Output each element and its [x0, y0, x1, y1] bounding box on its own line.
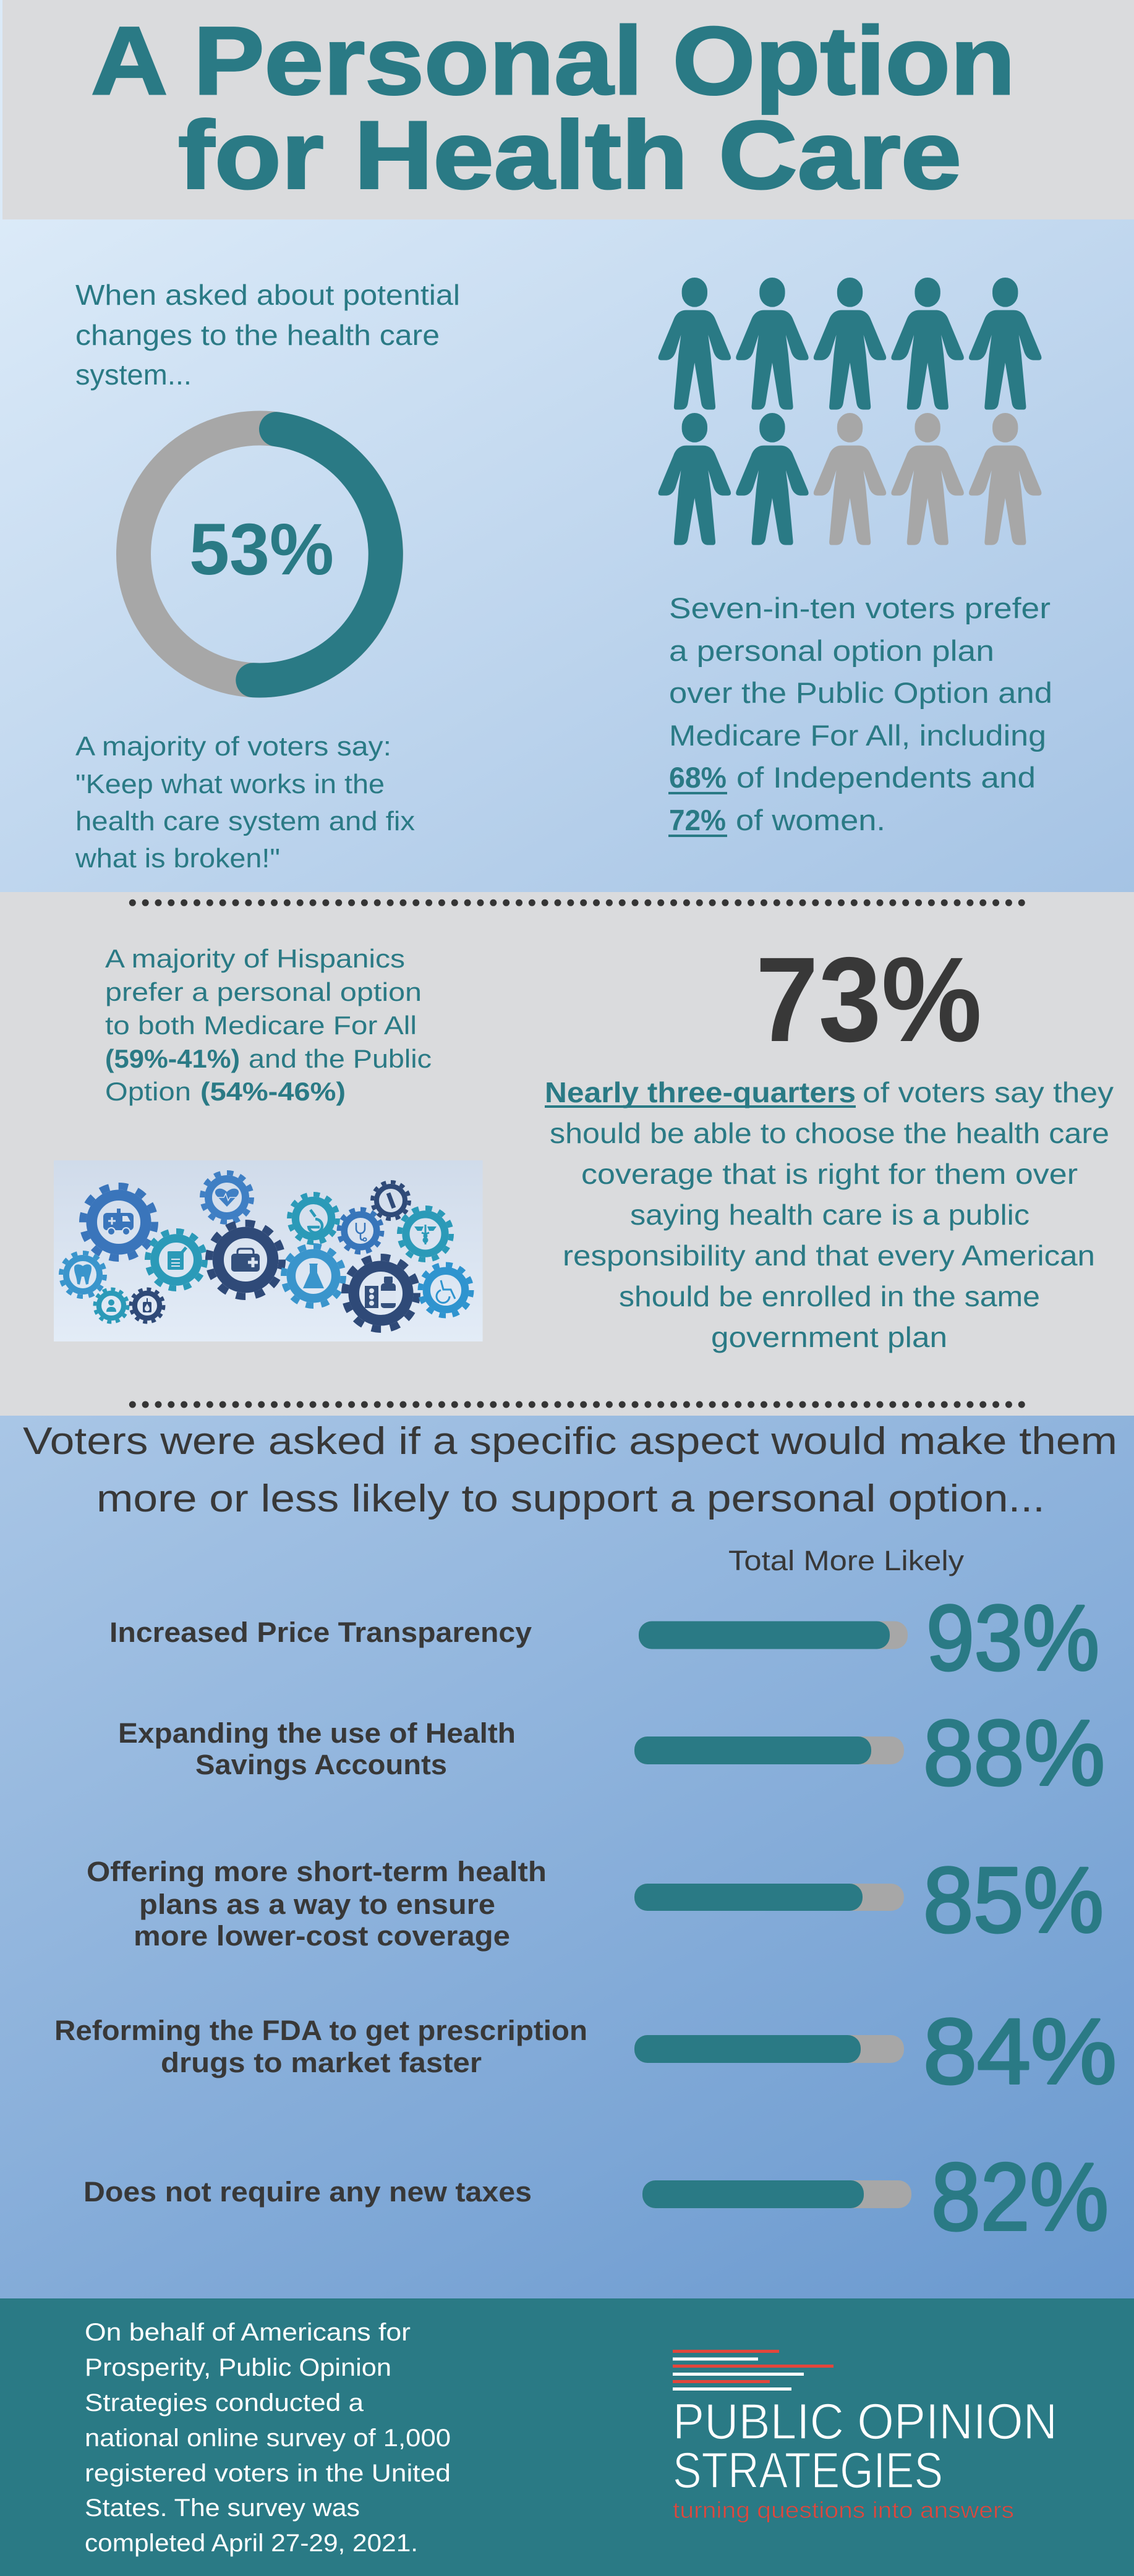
- section heading: Voters were asked if a specific aspect would make them: [23, 1420, 1117, 1463]
- gear: ambulance: [83, 1186, 155, 1258]
- row: no new taxes: Does not require any new taxes: [83, 2176, 532, 2208]
- row: FDA reform: Reforming the FDA to get prescription: [54, 2015, 587, 2046]
- gear: wheelchair: [420, 1265, 471, 1316]
- column label: Total More Likely: [728, 1545, 965, 1576]
- 73% statistic: 73%: [756, 932, 982, 1067]
- methodology text: Prosperity, Public Opinion: [85, 2354, 391, 2381]
- panel: Hispanics and choice: [0, 892, 1134, 1416]
- Hispanics text: [105, 944, 432, 1106]
- row: price transparency: [109, 1586, 1099, 1690]
- logo: Public Opinion Strategies: [673, 2350, 1057, 2523]
- panel: header: [2, 0, 1134, 219]
- panel: specific aspects: [23, 1420, 1117, 2250]
- row: short-term plans: more lower-cost coverage: [134, 1920, 510, 1952]
- gear: nurse: [95, 1289, 128, 1322]
- gear: tooth: [61, 1252, 105, 1297]
- gear: heart: [202, 1173, 252, 1222]
- three-quarters text: saying health care is a public: [630, 1199, 1030, 1231]
- seven-in-ten text: Seven-in-ten voters prefer: [669, 592, 1051, 624]
- Hispanics text: (54%-46%): [200, 1077, 346, 1106]
- seven-in-ten text: Medicare For All, including: [669, 719, 1046, 752]
- methodology text: national online survey of 1,000: [85, 2425, 451, 2452]
- seven-in-ten text: 68%: [669, 761, 727, 794]
- intro text: [75, 279, 460, 391]
- panel: potential changes: [75, 279, 460, 874]
- majority quote: [75, 731, 415, 874]
- majority quote: health care system and fix: [75, 806, 415, 836]
- title: A Personal Option: [91, 7, 1015, 115]
- Hispanics text: Option: [105, 1077, 191, 1106]
- title: for Health Care: [178, 101, 961, 209]
- row: FDA reform: drugs to market faster: [161, 2047, 482, 2078]
- methodology text: Strategies conducted a: [85, 2389, 364, 2417]
- section heading: more or less likely to support a personal option...: [96, 1477, 1045, 1520]
- row: short-term plans: Offering more short-term health: [87, 1856, 547, 1887]
- Hispanics text: and the Public: [249, 1044, 432, 1073]
- Hispanics text: to both Medicare For All: [105, 1011, 417, 1040]
- image: medical gears: [54, 1160, 483, 1341]
- methodology text: [85, 2319, 451, 2557]
- three-quarters text: should be enrolled in the same: [619, 1280, 1040, 1312]
- methodology text: completed April 27-29, 2021.: [85, 2530, 418, 2557]
- Hispanics text: prefer a personal option: [105, 977, 422, 1006]
- three-quarters text: of voters say they: [863, 1076, 1114, 1108]
- row: health savings accounts: Expanding the use of Health: [118, 1717, 516, 1749]
- donut chart: 53%: 53%: [189, 509, 334, 590]
- logo: Public Opinion Strategies: PUBLIC OPINION: [673, 2394, 1057, 2450]
- panel: seven in ten: [659, 278, 1052, 837]
- majority quote: A majority of voters say:: [75, 731, 391, 762]
- icon array: 7 of 10 people: [659, 278, 1041, 545]
- section heading: [23, 1420, 1117, 1520]
- majority quote: what is broken!": [75, 843, 280, 874]
- logo: Public Opinion Strategies: turning questions into answers: [673, 2497, 1014, 2523]
- intro text: system...: [75, 359, 192, 391]
- gear: caduceus: [399, 1208, 451, 1260]
- row: short-term plans: plans as a way to ensure: [139, 1889, 495, 1920]
- seven-in-ten text: [668, 592, 1052, 837]
- gear: microscope: [289, 1194, 338, 1243]
- methodology text: registered voters in the United: [85, 2460, 451, 2487]
- intro text: changes to the health care: [75, 319, 440, 351]
- seven-in-ten text: 72%: [669, 804, 726, 836]
- gear: flask: [284, 1246, 343, 1306]
- methodology text: States. The survey was: [85, 2494, 360, 2522]
- row: FDA reform: 84%: [923, 1999, 1117, 2103]
- gear: syringe: [372, 1182, 409, 1219]
- seven-in-ten text: of women.: [736, 804, 885, 836]
- title: [91, 7, 1015, 209]
- logo: Public Opinion Strategies: STRATEGIES: [673, 2442, 943, 2499]
- three-quarters text: should be able to choose the health care: [550, 1117, 1109, 1149]
- seven-in-ten text: a personal option plan: [669, 634, 994, 667]
- row: short-term plans: [87, 1848, 1104, 1952]
- seven-in-ten text: of Independents and: [736, 761, 1036, 794]
- row: health savings accounts: 88%: [923, 1701, 1105, 1804]
- intro text: When asked about potential: [75, 279, 460, 311]
- three-quarters text: responsibility and that every American: [563, 1239, 1095, 1272]
- seven-in-ten text: over the Public Option and: [669, 676, 1052, 709]
- donut chart: 53%: [134, 428, 386, 680]
- Hispanics text: (59%-41%): [105, 1044, 240, 1073]
- majority quote: "Keep what works in the: [75, 769, 385, 799]
- row: price transparency: 93%: [926, 1586, 1099, 1690]
- row: health savings accounts: [118, 1701, 1105, 1804]
- row: health savings accounts: Savings Accounts: [195, 1749, 447, 1780]
- gear: medical kit: [209, 1223, 282, 1296]
- row: FDA reform: [54, 1999, 1117, 2103]
- gear: pills and bottle: [345, 1257, 417, 1329]
- row: price transparency: Increased Price Transparency: [109, 1617, 532, 1648]
- three-quarters text: [545, 1076, 1114, 1353]
- row: short-term plans: 85%: [923, 1848, 1104, 1952]
- row: no new taxes: [83, 2143, 1109, 2250]
- row: no new taxes: 82%: [931, 2143, 1109, 2250]
- panel: footer: [0, 2298, 1134, 2576]
- three-quarters text: coverage that is right for them over: [581, 1158, 1078, 1190]
- Hispanics text: A majority of Hispanics: [105, 944, 405, 973]
- gear: document: [148, 1231, 205, 1288]
- gear: drop: [130, 1289, 164, 1322]
- methodology text: On behalf of Americans for: [85, 2319, 411, 2346]
- three-quarters text: government plan: [711, 1321, 947, 1353]
- three-quarters text: Nearly three-quarters: [545, 1076, 856, 1108]
- gear: stethoscope: [339, 1209, 382, 1252]
